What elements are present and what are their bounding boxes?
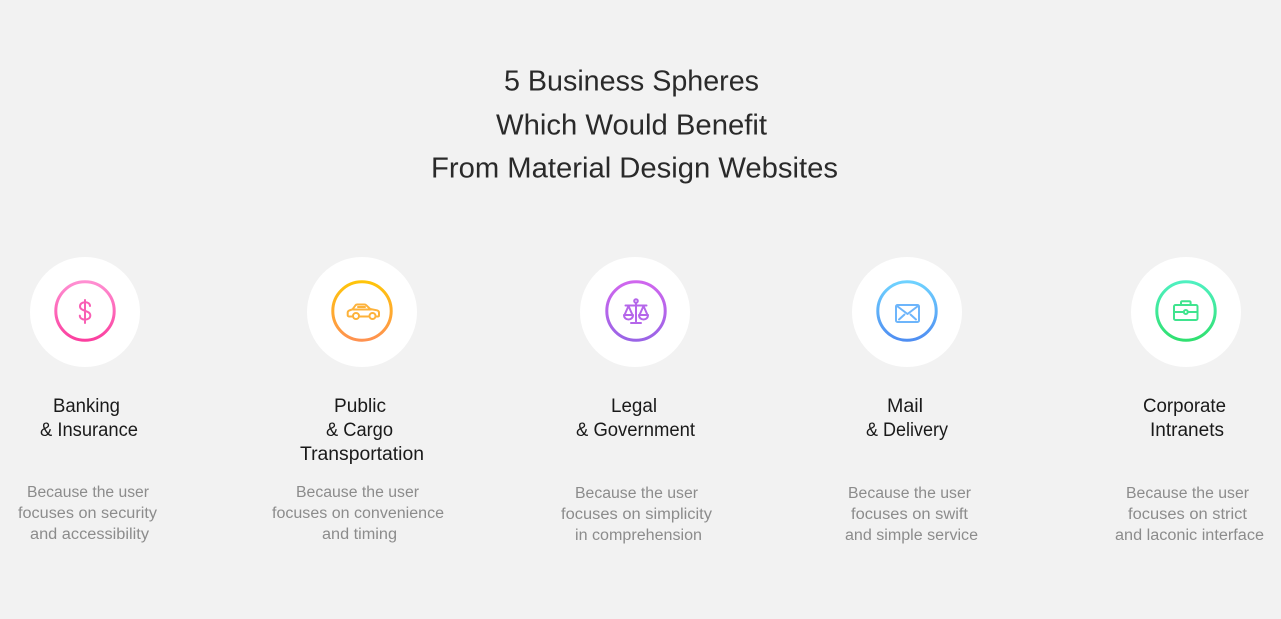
description: public and cargo transportation: Because the user	[296, 484, 419, 501]
description: mail and delivery	[845, 485, 978, 544]
icon: scales	[580, 257, 690, 367]
heading: public and cargo transportation: & Cargo	[326, 420, 393, 441]
heading: public and cargo transportation: Transportation	[300, 444, 424, 465]
description: banking and insurance: Because the user	[27, 484, 149, 501]
heading: legal and government: & Government	[576, 420, 696, 441]
description: banking and insurance: and accessibility	[30, 526, 149, 543]
heading: banking and insurance	[40, 396, 138, 441]
description: mail and delivery: focuses on swift	[851, 506, 969, 523]
heading: public and cargo transportation: Public	[334, 396, 386, 417]
description: legal and government: focuses on simplicity	[561, 506, 712, 523]
icon: briefcase	[1131, 257, 1241, 367]
heading: corporate intranets: Intranets	[1150, 420, 1224, 441]
panel: banking and insurance	[18, 257, 157, 543]
panel: mail and delivery	[845, 257, 978, 544]
description: corporate intranets	[1115, 485, 1264, 544]
title: From Material Design Websites	[431, 152, 838, 184]
heading: legal and government	[576, 396, 696, 441]
heading: banking and insurance: & Insurance	[40, 420, 138, 441]
title: Which Would Benefit	[496, 110, 767, 142]
heading: corporate intranets	[1143, 396, 1226, 441]
description: legal and government: in comprehension	[575, 527, 702, 544]
description: corporate intranets: focuses on strict	[1128, 506, 1248, 523]
description: corporate intranets: and laconic interface	[1115, 527, 1264, 544]
description: legal and government: Because the user	[575, 485, 698, 502]
description: corporate intranets: Because the user	[1126, 485, 1249, 502]
panel: corporate intranets	[1115, 257, 1264, 544]
heading: public and cargo transportation	[300, 396, 424, 465]
description: banking and insurance	[18, 484, 157, 543]
panel: public and cargo transportation	[272, 257, 444, 543]
description: public and cargo transportation	[272, 484, 444, 543]
heading: legal and government: Legal	[611, 396, 657, 417]
description: legal and government	[561, 485, 712, 544]
heading: mail and delivery: Mail	[887, 396, 923, 417]
heading: mail and delivery	[866, 396, 948, 441]
title: 5 Business Spheres	[504, 66, 759, 98]
heading: corporate intranets: Corporate	[1143, 396, 1226, 417]
icon: dollar sign	[30, 257, 140, 367]
description: mail and delivery: Because the user	[848, 485, 971, 502]
description: public and cargo transportation: focuses on convenience	[272, 505, 444, 522]
panel: legal and government	[561, 257, 712, 544]
heading: mail and delivery: & Delivery	[866, 420, 948, 441]
description: banking and insurance: focuses on security	[18, 505, 157, 522]
icon: envelope	[852, 257, 962, 367]
heading: banking and insurance: Banking	[53, 396, 120, 417]
icon: car	[307, 257, 417, 367]
description: public and cargo transportation: and timing	[322, 526, 397, 543]
description: mail and delivery: and simple service	[845, 527, 978, 544]
title	[431, 66, 838, 184]
